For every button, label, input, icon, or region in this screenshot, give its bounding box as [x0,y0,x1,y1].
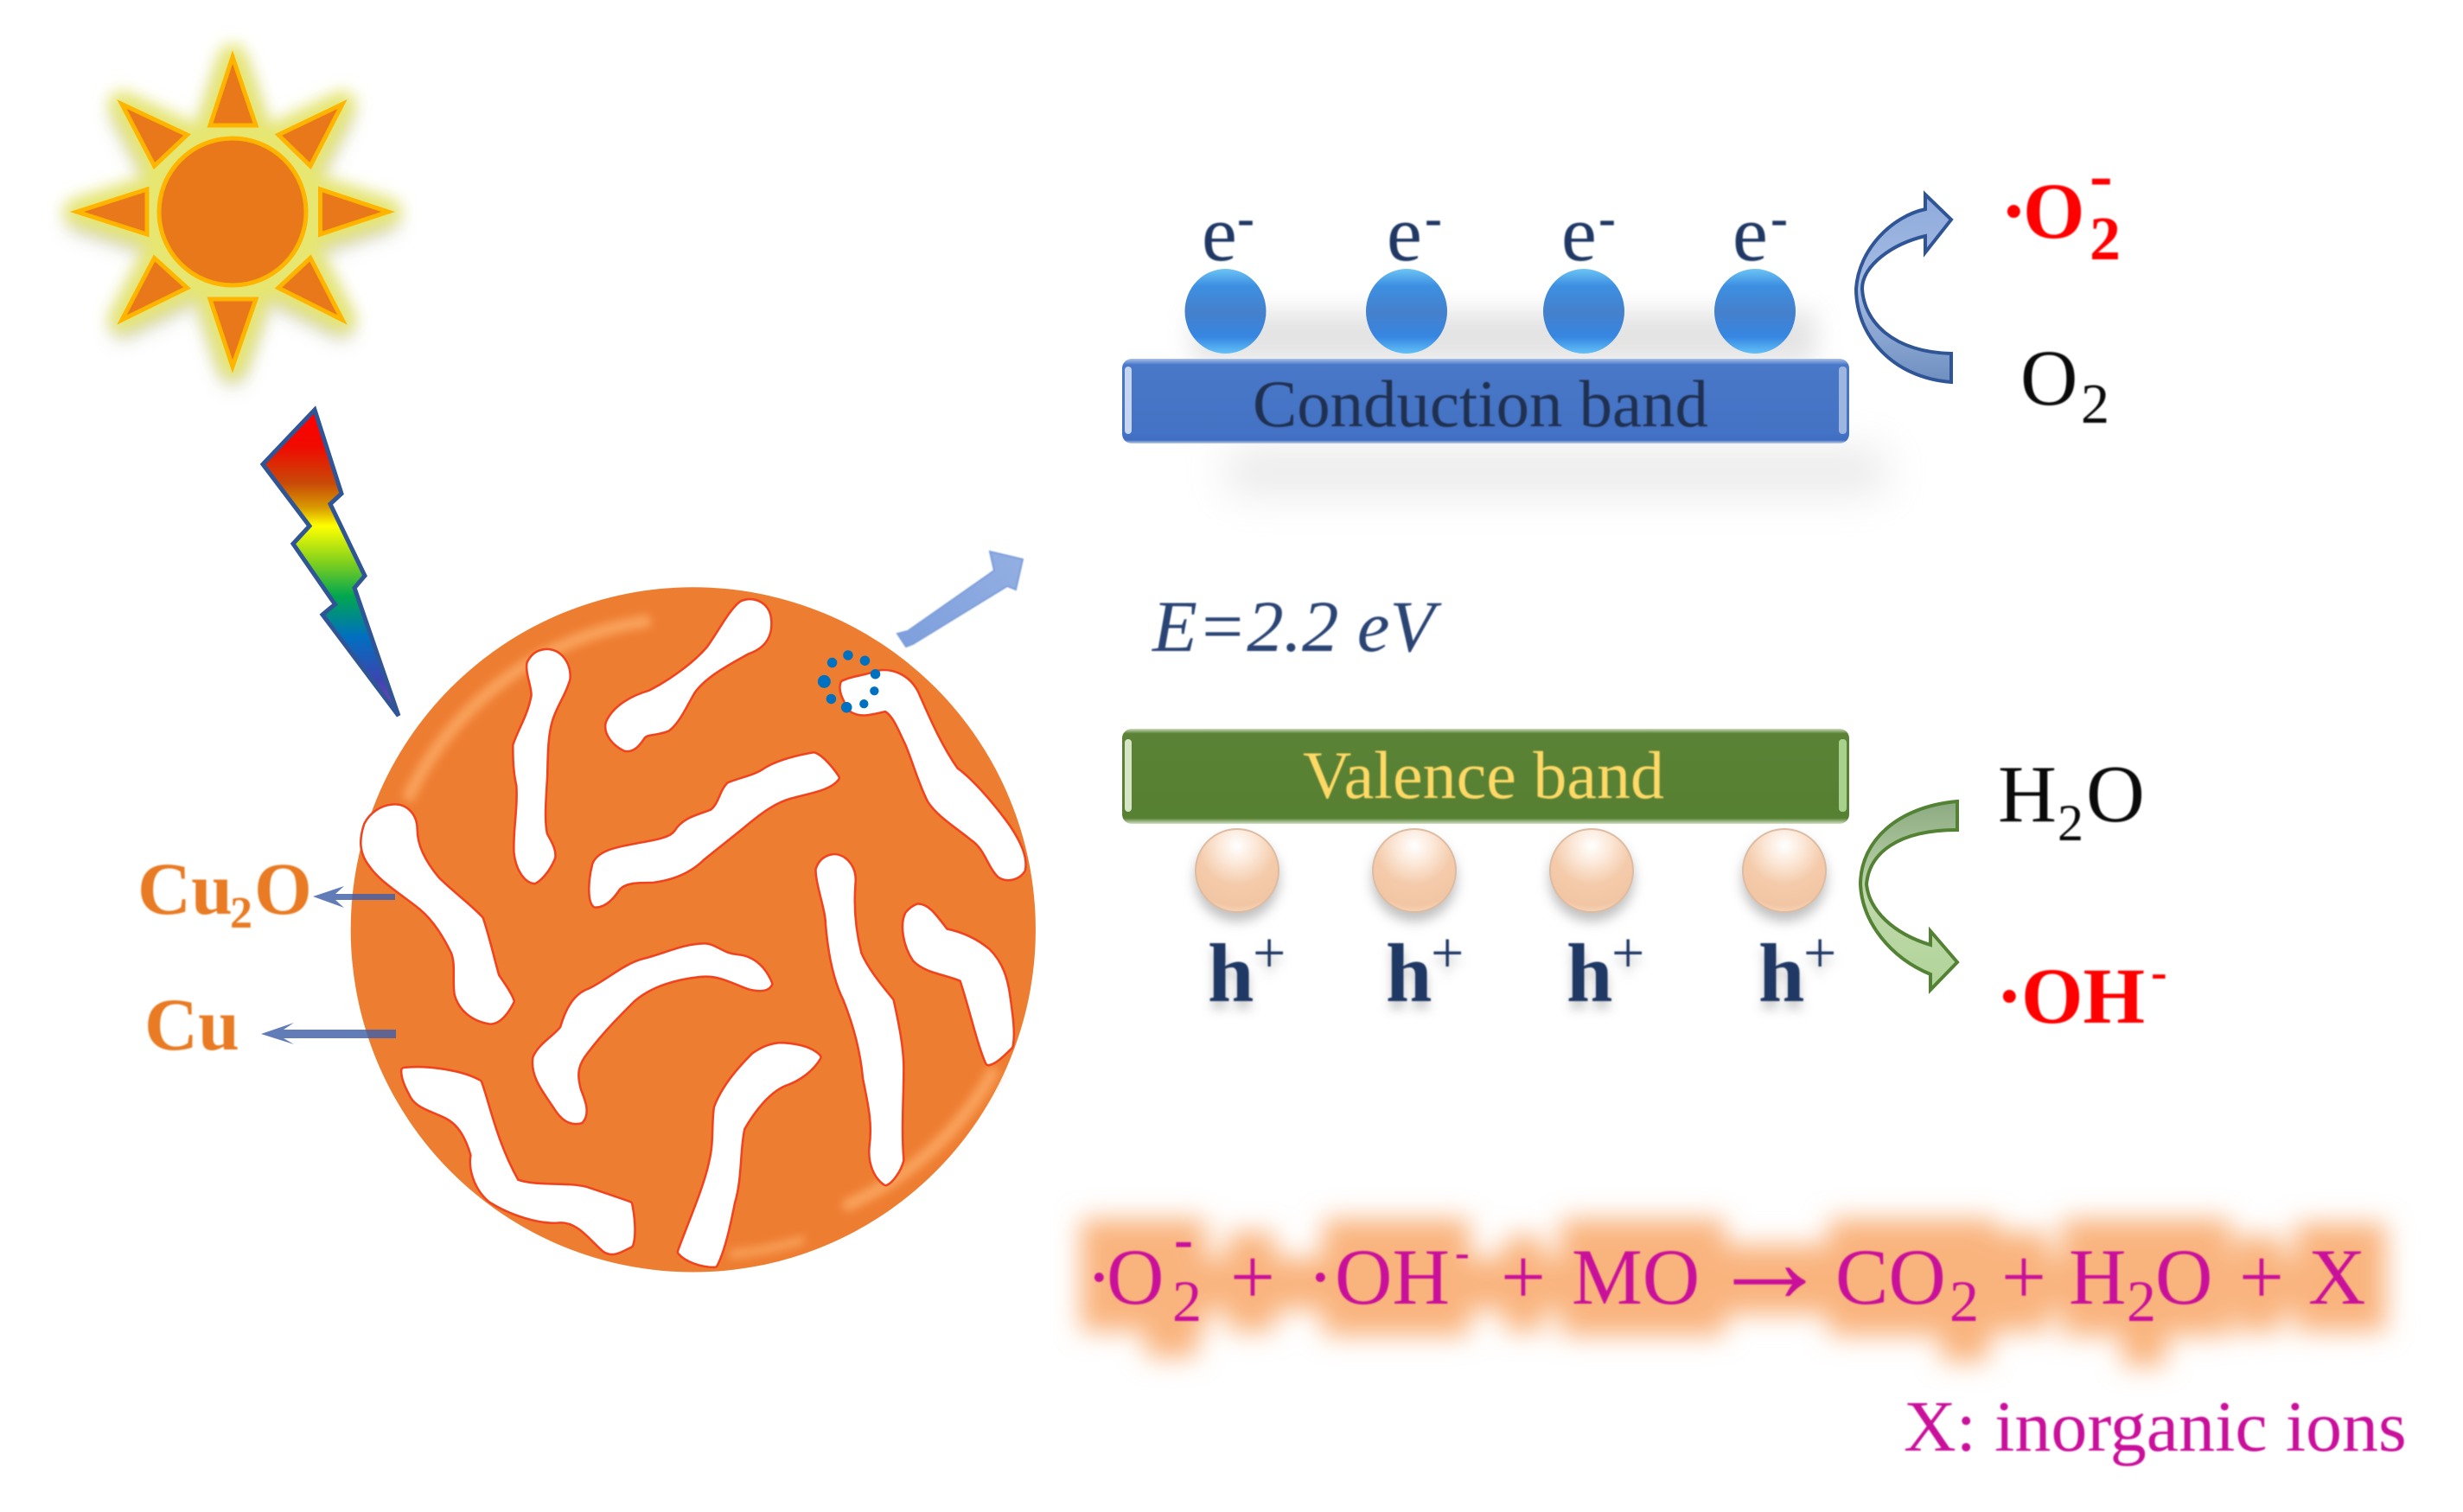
equation text: OH [1335,1233,1450,1321]
equation text: + [2001,1233,2046,1321]
hole labels: h [1566,927,1612,1019]
label: Cu2O: Cu [137,847,233,930]
soft shadows [1193,311,1815,363]
electron labels: e [1202,189,1237,278]
equation text: 2 [2127,1268,2156,1334]
hole labels: h [1208,927,1254,1019]
arrow: Cu2O pointer [313,886,395,908]
note: X definition: X: inorganic ions [1904,1387,2407,1467]
dotted circle marking rod tip [818,650,880,713]
equation text: 2 [1172,1268,1202,1334]
electron labels: - [1598,189,1616,246]
equation text: + [2239,1233,2284,1321]
label: superoxide radical: O [2023,167,2085,255]
equation text: CO [1835,1233,1946,1321]
equation text: O [2155,1233,2212,1321]
icon: rainbow lightning bolt [263,410,399,716]
arrow: O2 to superoxide [1856,195,1951,382]
electron spheres [1184,269,1796,354]
hole labels: + [1253,920,1286,986]
equation text: H [2069,1233,2126,1321]
label: band gap energy: E=2.2 eV [1152,586,1443,667]
band bar [1122,729,1849,824]
arrow: Cu pointer [261,1023,396,1044]
equation text [1086,1195,2365,1334]
equation text: + [1501,1233,1546,1321]
white rods [364,603,1023,1264]
label: superoxide radical: 2 [2090,204,2121,273]
arrow: H2O to hydroxyl [1860,801,1957,990]
hole labels: + [1431,920,1464,986]
label: superoxide radical: - [2090,137,2113,214]
band label: Valence band [1303,737,1664,813]
electron labels: e [1732,189,1768,278]
electron labels: - [1771,189,1788,246]
panel: conduction band with electrons [1122,189,1885,493]
label: O2: 2 [2081,373,2109,436]
equation: degradation reaction with orange glow [1081,1195,2386,1366]
label: superoxide radical: · [2000,167,2027,255]
equation text: MO [1572,1233,1700,1321]
label: hydroxyl radical: - [2151,946,2167,999]
label: hydroxyl radical: OH [2021,952,2145,1040]
equation text: · [1086,1233,1113,1321]
label: Cu2O [137,847,312,938]
label: Cu: Cu [144,983,239,1066]
label: Cu2O: 2 [230,889,252,938]
hole labels: h [1758,927,1804,1019]
equation text: - [1455,1228,1470,1276]
hole labels: + [1611,920,1644,986]
label: Cu2O: O [254,847,312,930]
label: hydroxyl radical [1996,946,2167,1040]
label: superoxide radical [2000,137,2121,273]
electron labels: - [1237,189,1254,246]
equation text: O [1107,1233,1164,1321]
label: H2O: 2 [2058,794,2083,852]
hole spheres [1196,829,1826,912]
equation text: → [1709,1195,1830,1329]
glow [1081,1219,2386,1366]
label: H2O: O [2086,750,2145,839]
label: H2O [1998,750,2145,852]
equation text: - [1174,1208,1193,1271]
hole labels: + [1803,920,1836,986]
hole labels [1208,920,1836,1019]
electron labels: - [1425,189,1442,246]
equation text: · [1307,1233,1334,1321]
electron labels [1202,189,1788,278]
arrow: sphere to band diagram [897,552,1023,647]
equation text: X [2308,1233,2365,1321]
band bar [1122,359,1849,443]
equation text: + [1230,1233,1275,1321]
electron labels: e [1387,189,1422,278]
sphere body [351,587,1036,1273]
icon: sun [77,57,388,377]
hole labels: h [1386,927,1432,1019]
label: O2: O [2020,334,2077,422]
panel: valence band with holes [1122,729,1849,1019]
band label: Conduction band [1253,367,1708,441]
nanoparticle sphere with Cu2O rods [351,587,1036,1273]
electron labels: e [1561,189,1597,278]
label: hydroxyl radical: · [1996,952,2023,1040]
label: O2 [2020,334,2109,436]
equation text: 2 [1949,1268,1979,1334]
label: H2O: H [1998,750,2057,839]
